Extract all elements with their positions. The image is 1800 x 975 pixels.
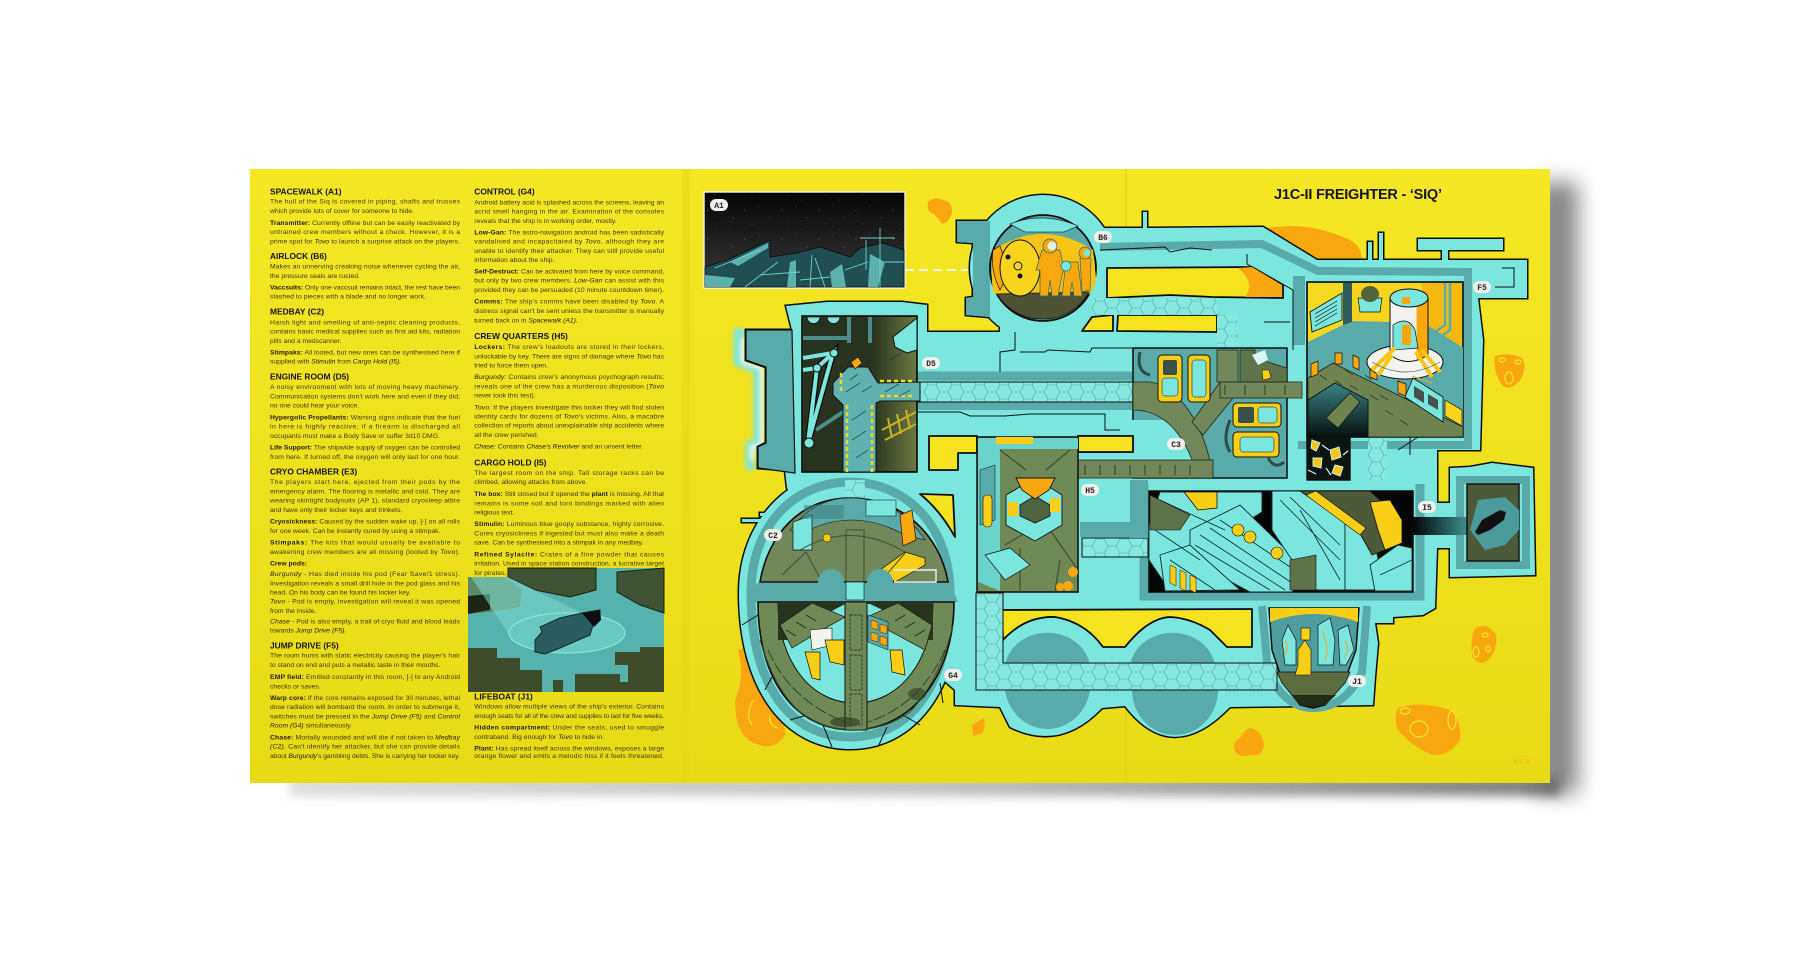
section: jump drive [270,640,461,760]
section: control: unable to identify their attacker. They can still provide useful [474,248,664,255]
section: cargo hold: remains is some soil and torn bindings marked with alien [474,500,664,507]
section: cryo chamber [269,466,461,635]
section: lifeboat: Windows allow multiple views of the ship's exterior. Contains [474,704,665,711]
room: medbay [760,498,948,582]
section: cargo hold: save. Can be synthesised into a stimpak in any medbay. [474,540,644,547]
room: control [758,602,954,730]
section: engine room: Hypergolic Propellants: Warning signs indicate that the fuel [270,414,460,421]
section: cryo chamber: CRYO CHAMBER (E3) [270,466,357,476]
dark arches under lower corridor [1005,633,1218,735]
section: cargo hold: irritation. Used in space station construction, a lucrative target [474,561,664,568]
engine rear block [746,330,795,473]
section: cryo chamber: Burgundy - Has died inside his pod (Fear Save/1 stress). [270,571,460,578]
label F5 [1473,281,1491,293]
section: crew quarters: unlockable by key. There are signs of damage where Tovo has [474,353,665,360]
label G4: G4 [948,672,958,681]
section: spacewalk: Transmitter: Currently offline but can be easily reactivated by [270,220,461,227]
section: control: information about the ship. [474,257,555,264]
section: control [474,186,665,324]
version tag: V1.0 [1513,757,1530,766]
section: cryo chamber: Tovo - Pod is empty, investigation will reveal it was opened [270,599,460,606]
section: spacewalk: The hull of the Siq is covered in piping, shafts and trusses [270,199,461,206]
section: medbay: pills and a medscanner. [270,338,342,345]
section: control: Android battery acid is splashed across the screens, leaving an [474,199,664,206]
room: engine room [802,316,920,472]
section: crew quarters: never took this test). [474,393,536,400]
section: cryo chamber: Chase - Pod is also empty, a trail of cryo fluid and blood leads [270,618,461,625]
label C2 [764,529,782,541]
section: cryo chamber: head. On his body can be found his locker key. [270,589,411,596]
section: cryo chamber: Stimpaks: The kits that would usually be available to [270,540,460,547]
section: jump drive: EMP field: Emitted constantly in this room, [-] to any Android [270,674,460,681]
section: medbay: Stimpaks: All looted, but new ones can be synthesised here if [270,349,460,356]
section: cryo chamber: towards Jump Drive (F5). [270,628,346,635]
section: engine room: Communication systems don't work here and even if they did; [270,393,460,400]
section: spacewalk [269,186,461,246]
section: crew quarters: Tovo: If the players investigate this locker they will find stolen [474,404,664,411]
section: crew quarters: all the crew perished. [474,432,539,439]
section: medbay: contains basic medical supplies such as first aid kits, radiation [270,329,460,336]
label H5 [1081,484,1099,496]
asteroid surface rings [749,358,1521,737]
title: J1C-II FREIGHTER - ‘SIQ’ [1274,187,1442,203]
section: lifeboat: Hidden compartment: Under the seats, used to smuggle [474,725,664,732]
section: control: acrid smell hanging in the air. Examination of the consoles [474,209,665,216]
section: cargo hold: Cures cryosickness if ingested but must also make a death [474,530,664,537]
yellow hull cutouts [920,267,1283,647]
section: crew quarters: Chase: Contains Chase's Revolver and an unsent letter. [474,444,643,451]
room: crew quarters [977,437,1148,592]
section: spacewalk: prime spot for Tovo to launch a surprise attack on the players. [270,238,460,246]
label G4 [944,669,962,681]
section: engine room [270,371,460,461]
corridor: cargo to shuttle bay [1413,517,1467,535]
label J1: J1 [1352,678,1362,687]
section: control: turned back on in Spacewalk (A1). [474,317,578,324]
walls [1308,283,1343,342]
section: engine room: occupants must make a Body Save or suffer 3d10 DMG. [270,433,440,440]
section: jump drive: (C2). Can't identify her attacker, but she can provide details [270,744,461,751]
hull panel line work [742,247,1514,747]
section: crew quarters: Lockers: The crew's loadouts are stored in their lockers, [474,344,664,351]
label H5: H5 [1085,487,1095,496]
section: engine room: in here is highly reactive; if a firearm is discharged all [270,424,460,431]
section: airlock: slashed to pieces with a blade and no longer work. [270,294,426,301]
section: engine room: from here. If turned off, the oxygen will only last for one hour. [270,454,460,461]
section: spacewalk: untrained crew members without a check. However, it is a [270,229,460,236]
room: stimulin store [1307,437,1350,480]
section: crew quarters: Burgundy: Contains crew's anonymous psychograph results; [474,374,664,381]
room: spacewalk exterior view [704,192,905,288]
label B6: B6 [1098,234,1108,243]
section: spacewalk: which provide lots of cover for someone to hide. [269,208,414,215]
section: cryo chamber: emergency alarm. The flooring is metallic and cold. They are [270,488,460,495]
orange asteroid overlap in cutout [1238,267,1282,297]
section: control: Low-Gan: The astro-navigation android has been sadistically [474,229,665,236]
section: control: Self-Destruct: Can be activated from here by voice command, [474,268,664,275]
section: jump drive: checks or saves. [270,683,321,690]
section: jump drive: switches must be pressed in the Jump Drive (F5) and Control [270,713,460,720]
warp core [1367,345,1443,379]
section: engine room: no one could hear your voice. [270,403,359,410]
section: cryo chamber: Cryosickness: Caused by the sudden wake up, [-] on all rolls [270,519,461,526]
label I5 [1418,501,1436,513]
label A1: A1 [714,202,724,211]
section: cargo hold: CARGO HOLD (I5) [474,457,547,467]
label C3 [1167,438,1185,450]
section: engine room: Life Support: The shipwide supply of oxygen can be controlled [270,445,460,452]
section: cryo chamber: and have only their locker keys and trinkets. [270,507,402,514]
section: jump drive: about Burgundy's gambling debts. She is carrying her locker key. [270,753,460,760]
section: cryo chamber: awakening crew members are all missing (looted by Tovo). [270,549,460,556]
label C2: C2 [768,532,778,541]
section: control: Comms: The ship's comms have been disabled by Tovo. A [474,299,664,306]
room: jump drive [1307,282,1463,437]
inner hull strips [751,244,1526,737]
section: medbay: Harsh light and smelling of anti-septic cleaning products, [270,319,460,326]
section: cargo hold: The box: Still closed but if opened the plant is missing. All that [474,491,664,498]
engine glow [738,333,762,470]
label J1 [1348,675,1366,687]
section: lifeboat: enough seats for all of the crew and supplies to last for five weeks. [474,713,664,720]
section: control: but only by two crew members. Low-Gan can assist with this [474,278,665,285]
section: control: distress signal can't be sent unless the transmitter is manually [474,308,665,315]
section: cargo hold [474,457,665,577]
airlock bracket [957,221,990,317]
section: crew quarters: collection of reports about unexplainable ship accidents where [474,423,664,430]
section: cargo hold: for pirates. [474,570,507,577]
section: airlock: Vaccsuits: Only one vaccsuit remains intact, the rest have been [270,285,460,292]
label D5: D5 [926,360,936,369]
section: lifeboat [474,692,665,760]
section: jump drive: JUMP DRIVE (F5) [270,640,339,650]
section: spacewalk: SPACEWALK (A1) [270,186,342,196]
room: lifeboat [1269,608,1359,708]
label F5: F5 [1477,284,1487,293]
section: jump drive: Warp core: If the core remains exposed for 30 minutes, lethal [270,695,460,702]
section: control: CONTROL (G4) [474,186,535,196]
dashed link from spacewalk to airlock [905,269,968,271]
console [1405,378,1443,422]
cryo pods [1158,355,1281,457]
room: airlock sphere [990,215,1096,321]
section: control: reveals that the ship is in working order, mostly. [474,218,617,225]
room labels [710,199,1491,687]
bulkhead between medbay and control [748,569,958,602]
astronauts in vaccsuits [1036,239,1091,296]
section: medbay: MEDBAY (C2) [270,307,324,317]
storage racks [1149,491,1412,592]
section: medbay: supplied with Stimulin from Cargo Hold (I5). [270,359,401,366]
section: cryo chamber: wearing skintight bodysuits (AP 1), standard cryosleep attire [269,498,460,505]
section: control: provided they can be persuaded (10 minute countdown timer). [474,287,664,294]
section: airlock [270,251,460,301]
section: cryo chamber: for one week. Can be instantly cured by using a stimpak. [270,528,441,535]
section: airlock: AIRLOCK (B6) [270,251,327,261]
section: crew quarters: CREW QUARTERS (H5) [474,331,568,341]
cryo floor walkways [1078,350,1302,478]
label C3: C3 [1171,441,1181,450]
section: jump drive: to stand on end and puts a metallic taste in their mouths. [270,662,441,669]
section: jump drive: dose radiation will bombard the room. In order to submerge it, [270,704,460,711]
section: engine room: A noisy environment with lots of moving heavy machinery. [270,384,460,391]
orange asteroids [735,198,1525,756]
label B6 [1094,231,1112,243]
background shadow under brochure [290,182,1578,796]
label D5 [922,357,940,369]
panel: rules text column two [468,186,665,760]
section: airlock: Makes an unnerving creaking noise whenever cycling the air, [270,264,460,271]
section: medbay [270,307,460,366]
section: jump drive: The room hums with static electricity causing the player's hair [270,653,461,660]
brochure paper [250,169,1550,783]
section: jump drive: Room (G4) simultaneously. [270,723,352,730]
section: crew quarters: reveals one of the crew has a murderous disposition (Tovo [474,383,664,390]
section: jump drive: Chase: Mortally wounded and will die if not taken to Medbay [270,734,461,741]
section: lifeboat: contraband. Big enough for Tovo to hide in. [474,734,604,741]
section: crew quarters [474,331,665,451]
floor panels [1308,322,1463,437]
section: lifeboat: orange flower and emits a melodic hiss if it feels threatened. [474,753,664,760]
room: cargo hold [1149,491,1413,593]
panel: rules text column one [269,186,461,760]
section: cryo chamber: from the inside. [270,608,317,615]
section: cargo hold: religious text. [474,509,514,516]
honeycomb corridors [845,298,1387,690]
illustration: escape pod in hangar [468,568,664,692]
section: lifeboat: LIFEBOAT (J1) [474,692,533,702]
label I5: I5 [1422,504,1432,513]
section: airlock: the pressure seals are rusted. [270,273,360,280]
section: cryo chamber: The players start here, ejected from their pods by the [270,479,460,486]
section: cargo hold: Stimulin: Luminous blue goopy substance, highly corrosive. [474,521,664,528]
section: control: vandalised and incapacitated by Tovo, although they are [474,239,664,246]
section: cargo hold: Refined Sylacite: Crates of a fine powder that causes [474,551,665,558]
room: shuttle bay [1467,484,1519,561]
section: crew quarters: tried to force them open. [474,362,548,369]
hull silhouette [739,195,1535,749]
section: cryo chamber: Crew pods: [270,561,307,568]
section: cargo hold: climbed, allowing attacks from above. [474,479,587,486]
section: cargo hold: The largest room on the ship. Tall storage racks can be [474,470,664,477]
room: cryo chamber [1078,348,1302,478]
section: lifeboat: Plant: Has spread itself across the windows, exposes a large [474,745,664,752]
label A1 [710,199,728,211]
section: crew quarters: identity cards for dozens of Tovo's victims. Also, a macabre [474,414,664,421]
section: cryo chamber: Investigation reveals a small drill hole in the pod glass and his [270,580,461,587]
section: engine room: ENGINE ROOM (D5) [270,371,349,381]
